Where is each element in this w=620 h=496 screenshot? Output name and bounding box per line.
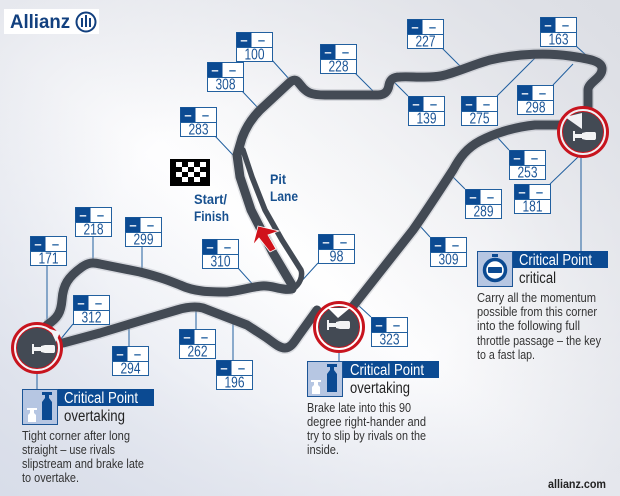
corner label 100: 100 bbox=[244, 46, 265, 64]
corner label 323: 323 bbox=[380, 332, 400, 348]
logo: Allianz bbox=[4, 9, 99, 34]
corner label 139: 139 bbox=[416, 110, 437, 128]
corner label 294: – bbox=[134, 346, 141, 362]
corner label 218: 218 bbox=[84, 222, 104, 238]
callout: middle critical point: Brake late into this 90 bbox=[307, 400, 411, 415]
corner label 196 bbox=[216, 360, 252, 392]
corner label 163: – bbox=[544, 18, 552, 32]
corner label 218: – bbox=[97, 208, 104, 222]
corner label 298: – bbox=[539, 86, 546, 100]
callout: left critical point: Critical Point bbox=[64, 390, 139, 407]
callout: left critical point: straight – use rivals bbox=[22, 442, 115, 457]
label: Start/Finish: Start/ bbox=[194, 191, 227, 207]
logo: Allianz: Allianz bbox=[10, 12, 70, 33]
footer: website: allianz.com bbox=[548, 477, 606, 491]
corner label 308: 308 bbox=[216, 76, 236, 94]
corner label 308 bbox=[208, 62, 244, 94]
corner label 227 bbox=[408, 20, 444, 50]
callout: right critical point: Carry all the momentum bbox=[477, 290, 596, 305]
corner label 298: 298 bbox=[526, 100, 546, 116]
corner label 289 bbox=[466, 190, 502, 220]
corner label 163 bbox=[540, 18, 576, 48]
track: main circuit bbox=[47, 54, 602, 348]
corner label 312 bbox=[74, 296, 110, 326]
checkered flag bbox=[170, 159, 210, 186]
corner label 309 bbox=[430, 238, 466, 268]
callout: left critical point: overtaking bbox=[64, 408, 125, 425]
corner label 294: – bbox=[116, 346, 124, 362]
callout: middle critical point: Critical Point bbox=[350, 362, 425, 379]
callout: left critical point: slipstream and brake late bbox=[22, 456, 144, 471]
corner label 100: – bbox=[258, 32, 265, 48]
corner label 310 bbox=[202, 240, 238, 270]
icon: stopwatch bbox=[478, 252, 512, 286]
callout: middle critical point: inside. bbox=[307, 442, 339, 457]
corner label 98: – bbox=[340, 234, 347, 250]
corner label 196: – bbox=[238, 360, 245, 376]
callout: right critical point: possible from this corner bbox=[477, 304, 598, 319]
corner label 228: – bbox=[342, 44, 349, 60]
corner label 253: 253 bbox=[518, 164, 538, 182]
callout: middle critical point bbox=[307, 361, 439, 457]
corner label 139: – bbox=[412, 96, 420, 112]
corner label 309: – bbox=[452, 238, 459, 252]
corner label 227: 227 bbox=[416, 34, 436, 50]
corner label 171 bbox=[30, 236, 66, 268]
corner label 163: – bbox=[562, 18, 569, 32]
corner label 228 bbox=[320, 44, 356, 76]
callout: right critical point: Critical Point bbox=[519, 252, 593, 269]
corner label 309: 309 bbox=[438, 252, 459, 268]
corner label 275: – bbox=[483, 96, 490, 112]
label: Start/Finish: Finish bbox=[194, 208, 229, 224]
corner label 323 bbox=[372, 318, 408, 348]
corner label 98: 98 bbox=[330, 248, 344, 266]
corner label 196: 196 bbox=[224, 374, 245, 392]
pit lane arrow bbox=[253, 226, 279, 252]
corner label 228: 228 bbox=[328, 58, 349, 76]
critical point marker: right corner bbox=[558, 108, 608, 156]
corner label 298: – bbox=[521, 86, 529, 100]
callout: middle critical point: degree right-hander and bbox=[307, 414, 426, 429]
corner label 181: – bbox=[536, 184, 543, 200]
corner label 299 bbox=[126, 218, 162, 248]
corner label 275 bbox=[462, 96, 498, 128]
callout: middle critical point: try to slip by rivals on the bbox=[307, 428, 426, 443]
icon: overtaking cars bbox=[22, 390, 58, 424]
track: pit lane bbox=[243, 150, 302, 289]
corner label 100 bbox=[236, 32, 272, 64]
corner label 308: – bbox=[211, 62, 219, 78]
corner label 283: – bbox=[184, 108, 192, 122]
corner label 310: – bbox=[224, 240, 231, 254]
label: Pit Lane: Pit bbox=[270, 171, 286, 187]
corner label 253: – bbox=[513, 150, 521, 166]
corner label 310: 310 bbox=[210, 254, 231, 270]
corner label 196: – bbox=[220, 360, 228, 376]
corner label 323: – bbox=[393, 318, 400, 332]
corner label 262: 262 bbox=[188, 344, 208, 360]
corner label 310: – bbox=[206, 240, 214, 254]
corner label 275: 275 bbox=[470, 110, 490, 128]
corner label 171: 171 bbox=[38, 250, 59, 268]
corner label 227: – bbox=[411, 20, 419, 34]
connector lines bbox=[37, 46, 597, 389]
callout: left critical point: to overtake. bbox=[22, 470, 79, 485]
callout: right critical point bbox=[477, 251, 608, 362]
corner label 218 bbox=[76, 208, 112, 238]
corner label 312: – bbox=[77, 296, 85, 310]
corner label 98 bbox=[318, 234, 354, 266]
corner label 294 bbox=[112, 346, 148, 378]
callout: right critical point: into the following full bbox=[477, 318, 580, 333]
corner label 171: – bbox=[52, 236, 59, 252]
label: Pit Lane: Lane bbox=[270, 188, 298, 204]
track: soft shadow bbox=[47, 54, 602, 348]
corner label 323: – bbox=[375, 318, 383, 332]
corner label 218: – bbox=[79, 208, 87, 222]
callout: right critical point: to a fast lap. bbox=[477, 347, 535, 362]
corner label 289: – bbox=[487, 190, 494, 204]
critical point marker: left corner bbox=[12, 324, 62, 372]
corner label 228: – bbox=[324, 44, 332, 60]
corner label 299: – bbox=[147, 218, 154, 232]
corner label 283: – bbox=[202, 108, 209, 122]
corner label 181: – bbox=[518, 184, 526, 200]
callout: right critical point: critical bbox=[519, 270, 556, 287]
corner label 309: – bbox=[434, 238, 442, 252]
corner label 98: – bbox=[322, 234, 330, 250]
corner label 181: 181 bbox=[522, 198, 543, 216]
corner label 312: – bbox=[95, 296, 102, 310]
callout: middle critical point: overtaking bbox=[350, 380, 410, 397]
corner label 139 bbox=[408, 96, 444, 128]
corner label 299: – bbox=[129, 218, 137, 232]
callout: left critical point bbox=[22, 389, 154, 485]
corner label 289: 289 bbox=[474, 204, 494, 220]
critical point marker: middle corner bbox=[314, 302, 364, 352]
icon: overtaking cars bbox=[308, 362, 342, 396]
corner label 299: 299 bbox=[134, 232, 154, 248]
corner label 262 bbox=[180, 330, 216, 360]
corner label 227: – bbox=[429, 20, 436, 34]
corner label 262: – bbox=[183, 330, 191, 344]
corner label 312: 312 bbox=[82, 310, 102, 326]
label: Pit Lane bbox=[270, 171, 298, 204]
corner label 289: – bbox=[469, 190, 477, 204]
corner label 253: – bbox=[531, 150, 538, 166]
corner label 298 bbox=[518, 86, 554, 116]
corner label 275: – bbox=[465, 96, 473, 112]
corner label 139: – bbox=[430, 96, 437, 112]
corner label 181 bbox=[514, 184, 550, 216]
corner label 100: – bbox=[240, 32, 248, 48]
corner label 283 bbox=[180, 108, 216, 138]
label: Start/Finish bbox=[194, 191, 229, 224]
corner label 253 bbox=[510, 150, 546, 182]
corner label 171: – bbox=[34, 236, 42, 252]
corner label 262: – bbox=[201, 330, 208, 344]
callout: left critical point: Tight corner after long bbox=[22, 428, 130, 443]
corner label 283: 283 bbox=[188, 122, 209, 138]
corner label 163: 163 bbox=[548, 32, 569, 48]
corner label 294: 294 bbox=[120, 360, 141, 378]
corner label 308: – bbox=[229, 62, 236, 78]
